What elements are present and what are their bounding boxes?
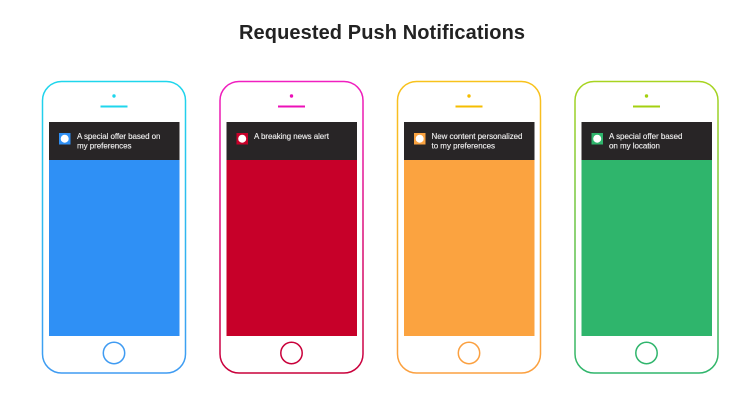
home button bbox=[636, 342, 657, 364]
panel: phone 4, special offer on location bbox=[575, 82, 718, 373]
notification text: New content personalized bbox=[432, 132, 522, 141]
notification text: A special offer based bbox=[609, 132, 682, 141]
camera dot bbox=[645, 94, 648, 98]
screen bbox=[226, 122, 357, 336]
phone body outline bbox=[575, 82, 718, 373]
notification text: my preferences bbox=[77, 142, 132, 150]
camera dot bbox=[290, 94, 293, 98]
app icon bbox=[59, 133, 70, 144]
speaker bbox=[100, 106, 128, 108]
screen bbox=[404, 122, 534, 336]
phone body outline bbox=[398, 82, 540, 373]
app icon bbox=[592, 133, 603, 144]
panel: phone 3, personalized content bbox=[398, 82, 540, 373]
notification text: A special offer based on bbox=[77, 132, 160, 141]
notification bar bbox=[226, 122, 357, 160]
speaker bbox=[456, 106, 482, 108]
app icon bbox=[236, 133, 248, 144]
home button bbox=[281, 342, 302, 364]
home button bbox=[458, 342, 480, 364]
speaker bbox=[278, 106, 305, 108]
notification bar bbox=[404, 122, 534, 160]
screen bbox=[49, 122, 180, 336]
panel: phone 2, breaking news bbox=[220, 82, 363, 373]
panel: phone 1, special offer on preferences bbox=[42, 82, 186, 373]
notification bar bbox=[582, 122, 712, 160]
notification text: to my preferences bbox=[432, 142, 495, 150]
app icon bbox=[414, 133, 426, 144]
phone body outline bbox=[42, 82, 186, 373]
phone body outline bbox=[220, 82, 363, 373]
speaker bbox=[633, 106, 660, 108]
notification bar bbox=[49, 122, 180, 160]
home button bbox=[103, 342, 125, 364]
camera dot bbox=[112, 94, 116, 98]
notification text: A breaking news alert bbox=[254, 132, 330, 141]
notification text: on my location bbox=[609, 142, 660, 150]
screen bbox=[582, 122, 712, 336]
camera dot bbox=[467, 94, 471, 98]
title: Requested Push Notifications bbox=[239, 22, 525, 44]
